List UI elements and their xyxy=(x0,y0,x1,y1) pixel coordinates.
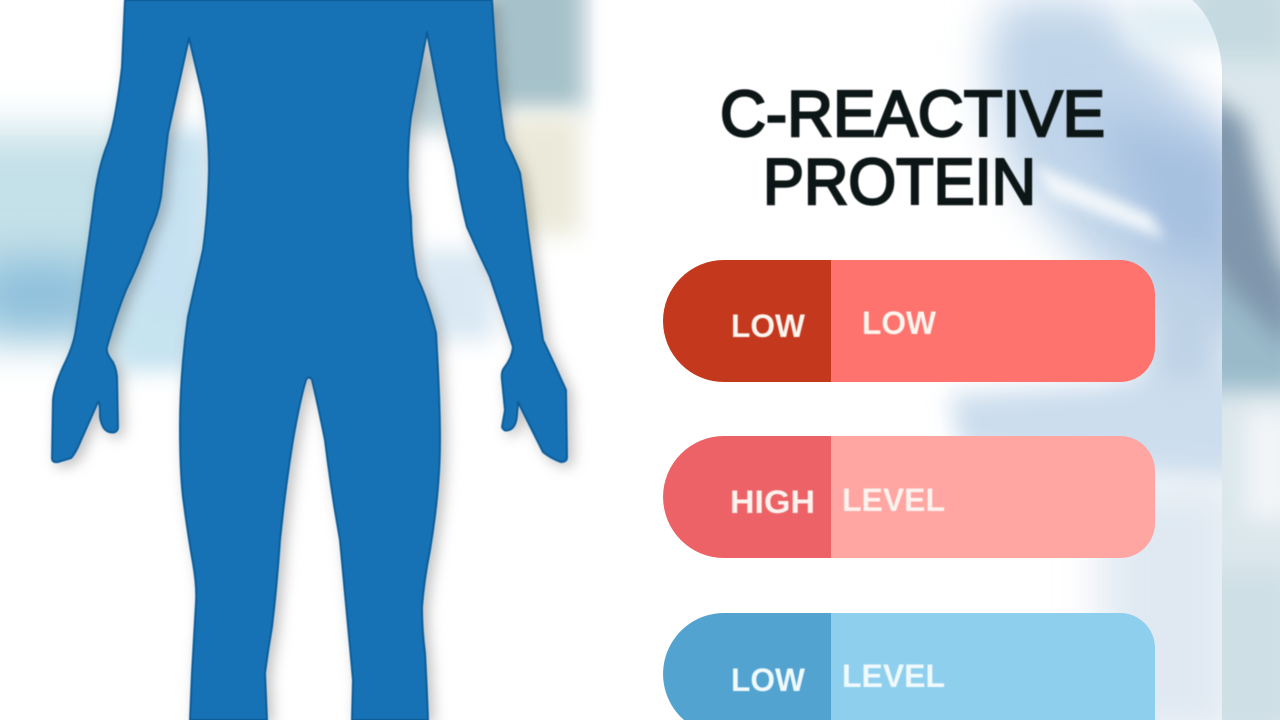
human body silhouette xyxy=(52,0,567,720)
pill: low level xyxy=(663,613,1155,720)
title xyxy=(720,77,1105,218)
title: C-REACTIVE xyxy=(720,77,1105,150)
title: PROTEIN xyxy=(763,145,1036,218)
pill: low low xyxy=(663,260,1155,382)
pill: high level: HIGH xyxy=(730,484,815,520)
pill: low level: LEVEL xyxy=(842,658,945,694)
pill: low low: LOW xyxy=(731,308,806,344)
panel: translucent card xyxy=(942,0,1222,720)
pill: low low: LOW xyxy=(862,305,937,341)
pill: high level: LEVEL xyxy=(842,482,945,518)
pill: low level: LOW xyxy=(731,662,806,698)
pill: high level xyxy=(663,436,1155,558)
